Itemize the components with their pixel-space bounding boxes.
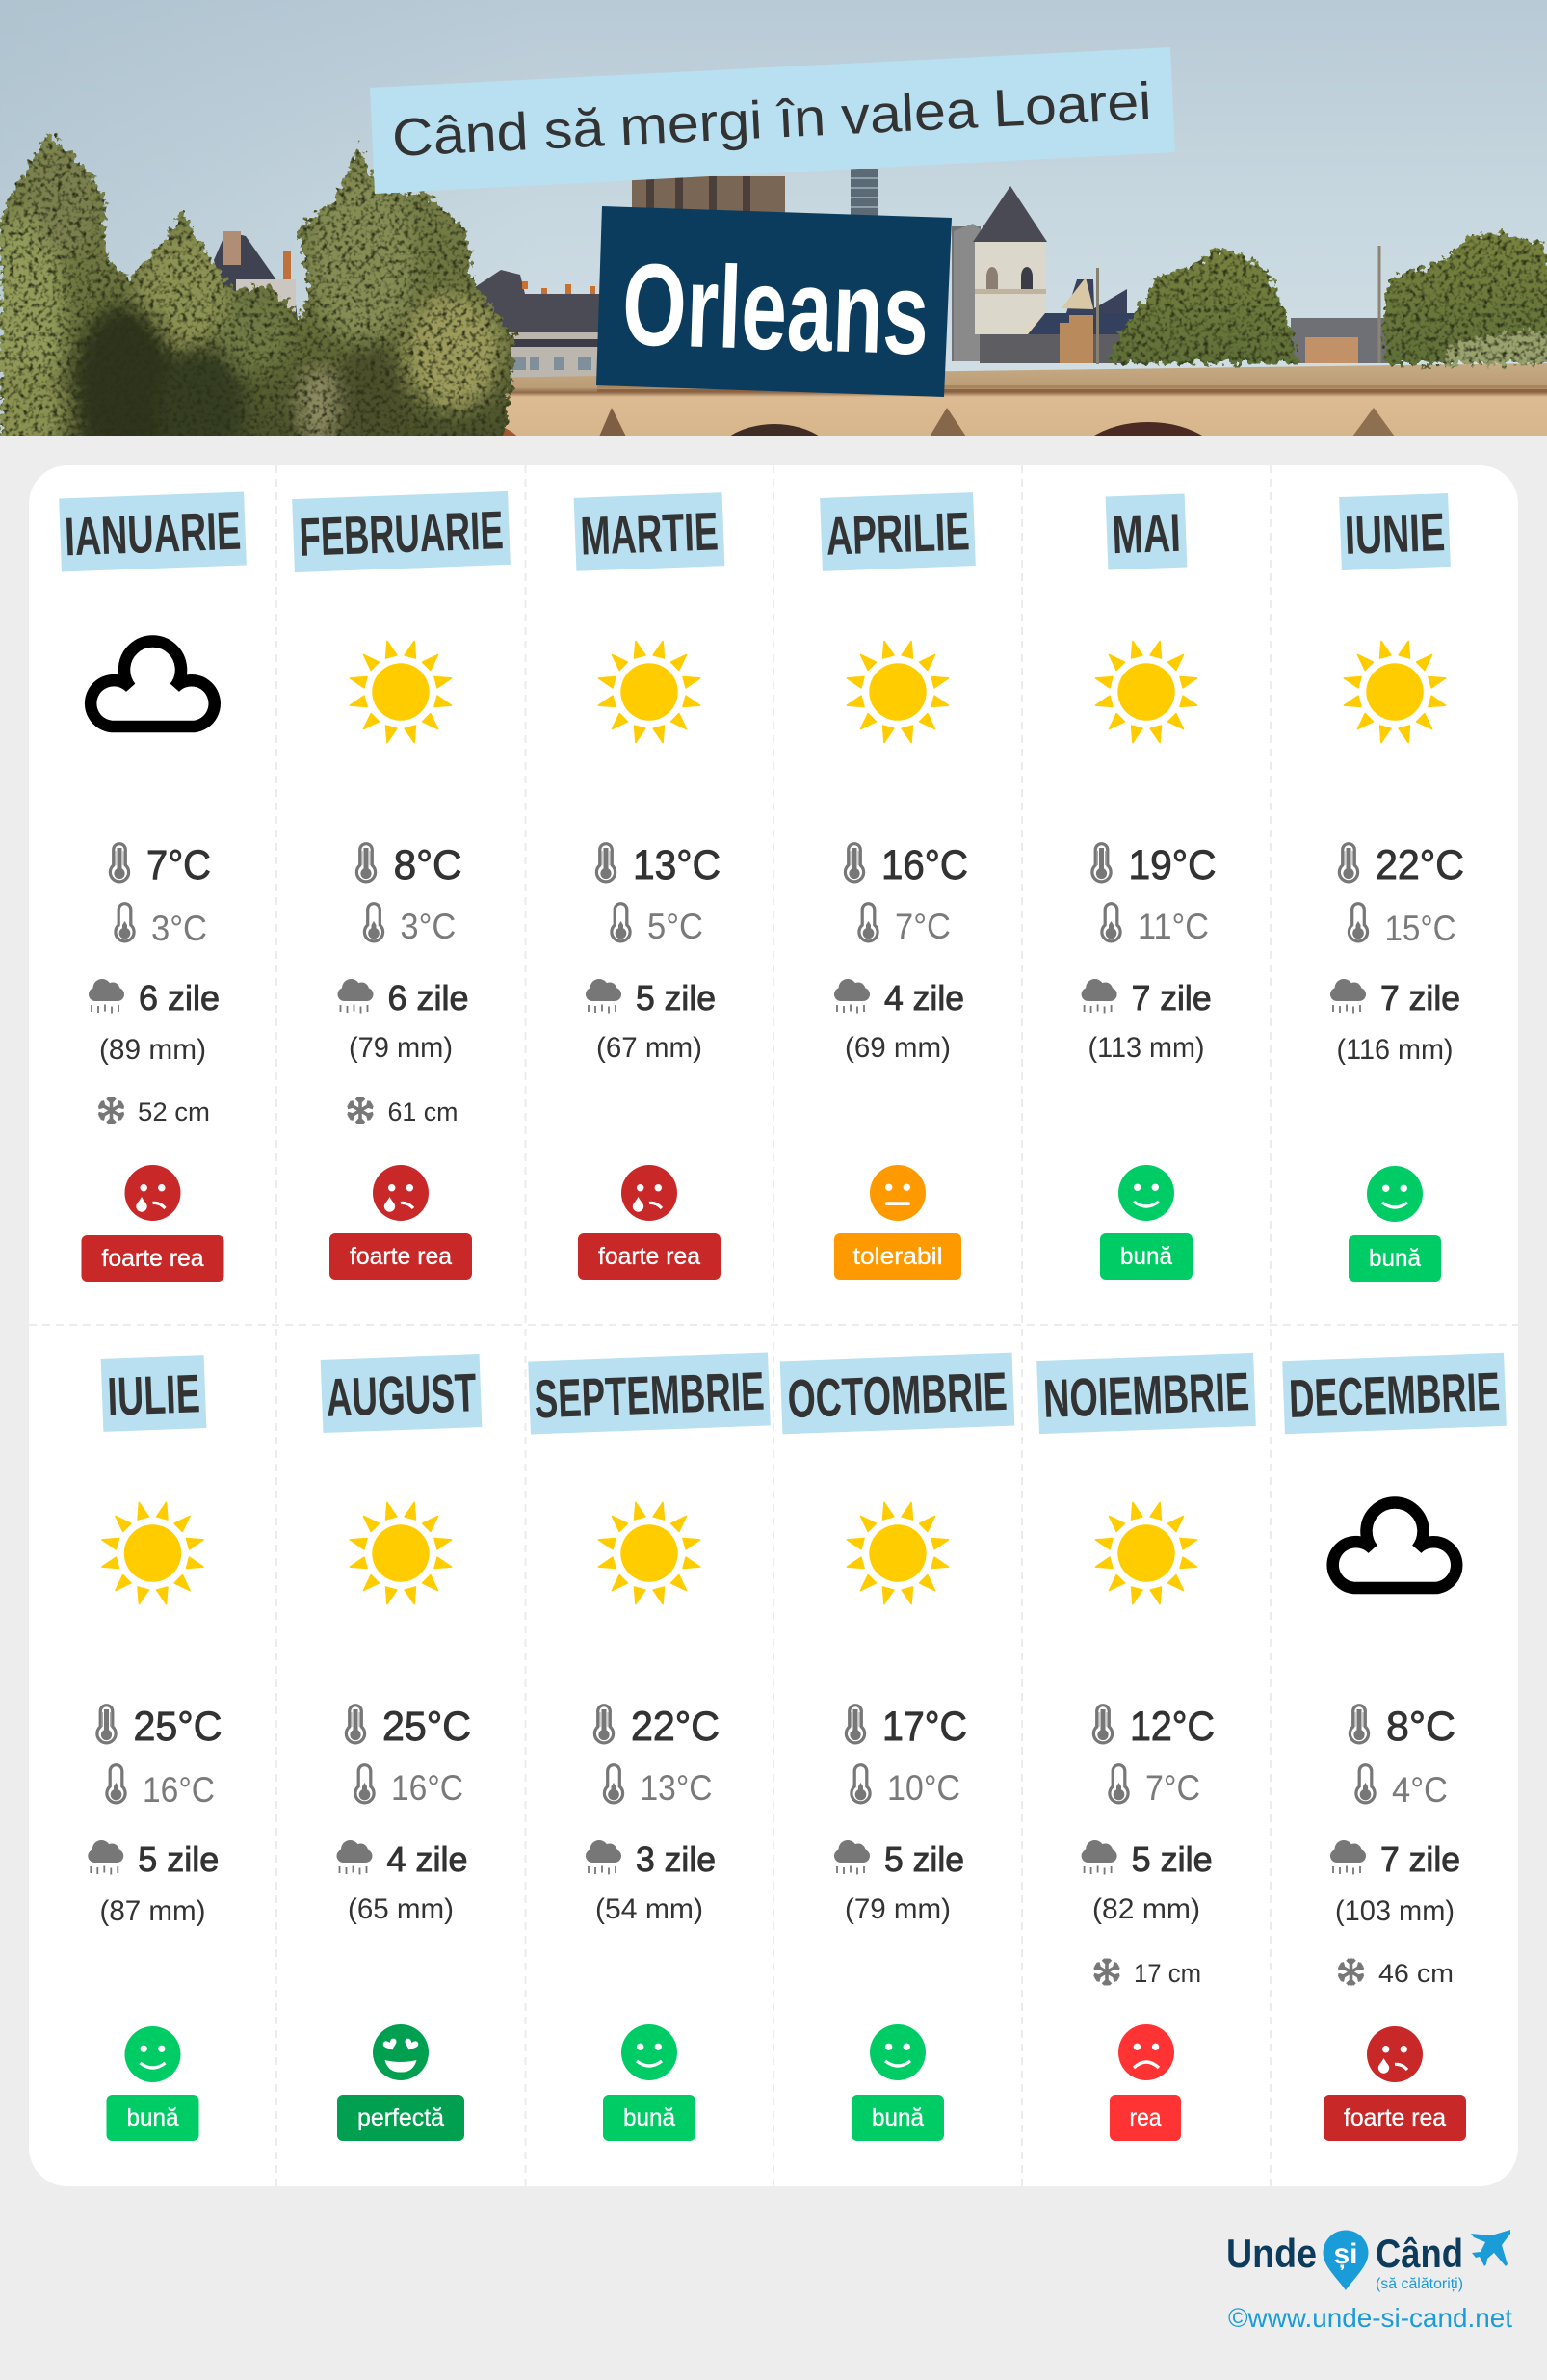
icon: sun <box>1343 640 1447 744</box>
month label <box>101 1355 206 1432</box>
rainy days <box>586 1839 716 1879</box>
rainfall: (65 mm) <box>348 1893 454 1925</box>
low temperature <box>859 904 951 946</box>
panel: septembrie <box>528 1352 771 2141</box>
low temperature <box>107 1765 215 1810</box>
high temperature: 12°C <box>1130 1704 1215 1750</box>
subtitle banner: Când să mergi în valea Loarei <box>391 71 1153 168</box>
month label <box>1339 493 1451 570</box>
rainfall: (113 mm) <box>1088 1032 1204 1064</box>
rainy days: 5 zile <box>138 1839 219 1879</box>
icon: sun <box>349 640 453 744</box>
rainy days: 6 zile <box>139 978 220 1018</box>
bridge <box>482 363 1547 436</box>
icon: good smiley <box>1367 1166 1423 1222</box>
low temperature: 3°C <box>400 907 456 946</box>
low temperature <box>364 904 456 946</box>
month label <box>321 1354 482 1433</box>
month label <box>820 492 976 571</box>
icon: good smiley <box>870 2024 926 2080</box>
icon: good smiley <box>1118 1165 1174 1221</box>
low temperature: 15°C <box>1385 909 1456 948</box>
rainy days <box>586 978 716 1018</box>
snowfall: 61 cm <box>387 1097 459 1126</box>
rainfall: (116 mm) <box>1337 1034 1453 1066</box>
low temperature <box>852 1765 960 1808</box>
low temperature: 3°C <box>151 909 207 948</box>
logo: Unde si Cand: Unde <box>1226 2231 1317 2276</box>
rainy days: 7 zile <box>1380 978 1460 1018</box>
low temperature <box>116 904 207 948</box>
high temperature <box>97 1704 223 1750</box>
foliage <box>0 133 1547 436</box>
rainy days <box>1330 978 1460 1018</box>
icon: cloud <box>91 642 215 727</box>
low temperature <box>1349 904 1456 948</box>
low temperature: 16°C <box>143 1770 215 1810</box>
rainfall: (67 mm) <box>596 1032 702 1064</box>
low temperature: 11°C <box>1138 907 1209 946</box>
rainy days: 7 zile <box>1380 1839 1460 1879</box>
high temperature <box>346 1704 471 1750</box>
panel: climate calendar card <box>29 465 1518 2186</box>
low temperature: 10°C <box>887 1768 960 1808</box>
rainfall: (79 mm) <box>349 1032 453 1064</box>
icon: airplane <box>1471 2230 1510 2266</box>
high temperature: 25°C <box>382 1704 471 1750</box>
panel: august <box>321 1354 482 2141</box>
rainy days: 5 zile <box>1132 1839 1213 1879</box>
high temperature <box>1093 1704 1215 1750</box>
icon: map pin: și <box>1333 2238 1358 2270</box>
rating badge <box>834 1233 961 1280</box>
panel: iulie <box>88 1355 222 2141</box>
icon: very bad smiley <box>125 1165 181 1221</box>
header photo: Orleans bridge and skyline <box>0 0 1547 436</box>
rating badge <box>1100 1233 1193 1280</box>
rating badge: foarte rea <box>598 1243 700 1270</box>
rating badge <box>852 2095 944 2141</box>
rainfall: (87 mm) <box>100 1895 206 1927</box>
rating badge <box>81 1235 223 1282</box>
title banner: Orleans <box>596 206 952 397</box>
panel: februarie <box>292 491 511 1280</box>
high temperature <box>596 842 721 888</box>
month label: IUNIE <box>1344 501 1446 566</box>
rainy days: 7 zile <box>1132 978 1212 1018</box>
low temperature: 7°C <box>895 907 951 946</box>
month label: IULIE <box>106 1362 201 1427</box>
panel: mai <box>1082 494 1216 1280</box>
rating badge: rea <box>1129 2104 1162 2131</box>
snowfall: 46 cm <box>1378 1959 1454 1988</box>
rainfall: (82 mm) <box>1092 1893 1200 1925</box>
rating badge <box>578 1233 721 1280</box>
rating badge: tolerabil <box>853 1243 942 1270</box>
rainy days <box>88 1839 219 1879</box>
high temperature: 22°C <box>1376 842 1464 888</box>
month label: OCTOMBRIE <box>786 1361 1009 1429</box>
high temperature <box>594 1704 720 1750</box>
month label: SEPTEMBRIE <box>533 1361 766 1429</box>
high temperature <box>1092 842 1216 888</box>
low temperature: 16°C <box>391 1768 463 1808</box>
title banner: Orleans: Orleans <box>620 238 931 380</box>
high temperature <box>1339 842 1464 888</box>
rating badge: foarte rea <box>1344 2104 1446 2131</box>
month label <box>59 492 247 571</box>
icon: very bad smiley <box>1367 2026 1423 2082</box>
icon: good smiley <box>125 2026 181 2082</box>
rainy days <box>1082 978 1212 1018</box>
panel: aprilie <box>820 492 976 1280</box>
subtitle banner <box>370 47 1175 194</box>
low temperature <box>1356 1765 1448 1810</box>
rainy days: 5 zile <box>884 1839 964 1879</box>
snowfall <box>97 1097 210 1126</box>
month label: APRILIE <box>825 500 971 567</box>
rating badge <box>1324 2095 1466 2141</box>
rainy days <box>337 1839 468 1879</box>
high temperature <box>845 842 968 888</box>
icon: sun <box>100 1501 205 1605</box>
month label: FEBRUARIE <box>298 499 505 568</box>
icon: sun <box>597 1501 701 1605</box>
rating badge <box>1349 1235 1441 1282</box>
low temperature: 5°C <box>647 907 703 946</box>
icon: bad smiley <box>1118 2024 1174 2080</box>
high temperature: 8°C <box>1386 1704 1455 1750</box>
rating badge: foarte rea <box>350 1243 452 1270</box>
high temperature: 25°C <box>133 1704 222 1750</box>
rainy days <box>1082 1839 1213 1879</box>
icon: sun <box>349 1501 453 1605</box>
logo: Unde si Cand: Când <box>1376 2231 1463 2276</box>
rainy days: 6 zile <box>387 978 468 1018</box>
low temperature <box>612 904 703 946</box>
website credit: ©www.unde-si-cand.net <box>1228 2303 1512 2333</box>
rainfall: (69 mm) <box>845 1032 951 1064</box>
high temperature: 17°C <box>882 1704 967 1750</box>
panel: noiembrie <box>1036 1353 1256 2141</box>
month label: MAI <box>1111 502 1182 565</box>
icon: sun <box>1094 1501 1198 1605</box>
high temperature: 16°C <box>881 842 968 888</box>
high temperature <box>110 842 211 888</box>
rainy days <box>834 978 964 1018</box>
month label: IANUARIE <box>64 500 242 567</box>
high temperature: 13°C <box>633 842 721 888</box>
panel: ianuarie <box>59 492 247 1282</box>
rainy days <box>1330 1839 1460 1879</box>
rainy days <box>89 978 220 1018</box>
icon: good smiley <box>621 2024 677 2080</box>
rating badge: bună <box>1369 1245 1421 1272</box>
month label <box>574 492 724 571</box>
panel: iunie <box>1330 493 1464 1282</box>
icon: cloud <box>1333 1503 1456 1588</box>
panel: octombrie <box>780 1353 1014 2141</box>
logo: Unde si Cand: (să călătoriți) <box>1376 2276 1463 2292</box>
month label: NOIEMBRIE <box>1042 1361 1250 1429</box>
panel: decembrie <box>1282 1353 1507 2141</box>
rainy days: 4 zile <box>387 1839 468 1879</box>
rating badge: bună <box>1120 1243 1172 1270</box>
rainy days <box>337 978 468 1018</box>
month label <box>780 1353 1014 1434</box>
snowfall <box>1093 1958 1201 1988</box>
icon: sun <box>846 640 950 744</box>
high temperature: 8°C <box>394 842 462 888</box>
rainfall: (54 mm) <box>595 1893 703 1925</box>
snowfall <box>1337 1958 1454 1988</box>
snowfall <box>347 1097 459 1126</box>
logo: Unde si Cand <box>1226 2230 1510 2292</box>
low temperature <box>1102 904 1209 946</box>
panel: martie <box>574 492 724 1280</box>
icon: perfect smiley <box>373 2024 429 2080</box>
rainy days: 4 zile <box>884 978 964 1018</box>
month label <box>292 491 511 572</box>
rating badge: foarte rea <box>102 1245 204 1272</box>
icon: neutral smiley <box>870 1165 926 1221</box>
rainfall: (89 mm) <box>99 1034 206 1066</box>
high temperature <box>1350 1704 1455 1750</box>
high temperature: 22°C <box>631 1704 720 1750</box>
high temperature <box>356 842 462 888</box>
icon: sun <box>1094 640 1198 744</box>
rainfall: (103 mm) <box>1335 1895 1455 1927</box>
rating badge: perfectă <box>357 2104 444 2131</box>
high temperature: 7°C <box>146 842 211 888</box>
rating badge: bună <box>872 2104 924 2131</box>
month label <box>528 1352 771 1435</box>
rainy days: 5 zile <box>636 978 716 1018</box>
rating badge <box>337 2095 464 2141</box>
snowfall: 52 cm <box>138 1097 210 1126</box>
left buildings <box>214 235 298 320</box>
low temperature: 4°C <box>1392 1770 1448 1810</box>
rating badge: bună <box>623 2104 675 2131</box>
icon: very bad smiley <box>621 1165 677 1221</box>
rating badge <box>329 1233 472 1280</box>
snowfall: 17 cm <box>1134 1959 1201 1988</box>
high temperature <box>846 1704 967 1750</box>
icon: map pin <box>1324 2230 1368 2290</box>
month label <box>1106 494 1187 569</box>
icon: sun <box>597 640 701 744</box>
low temperature: 7°C <box>1145 1768 1200 1808</box>
rating badge <box>1110 2095 1181 2141</box>
low temperature <box>1110 1765 1200 1808</box>
high temperature: 19°C <box>1129 842 1216 888</box>
icon: sun <box>846 1501 950 1605</box>
icon: very bad smiley <box>373 1165 429 1221</box>
rainfall: (79 mm) <box>845 1893 951 1925</box>
low temperature <box>355 1765 463 1808</box>
low temperature: 13°C <box>640 1768 713 1808</box>
month label: MARTIE <box>579 500 720 567</box>
month label <box>1036 1353 1256 1434</box>
low temperature <box>604 1765 713 1808</box>
month label: AUGUST <box>325 1362 478 1428</box>
rainy days <box>834 1839 964 1879</box>
rating badge: bună <box>127 2104 179 2131</box>
rainy days: 3 zile <box>636 1839 716 1879</box>
rating badge <box>106 2095 198 2141</box>
rating badge <box>603 2095 695 2141</box>
